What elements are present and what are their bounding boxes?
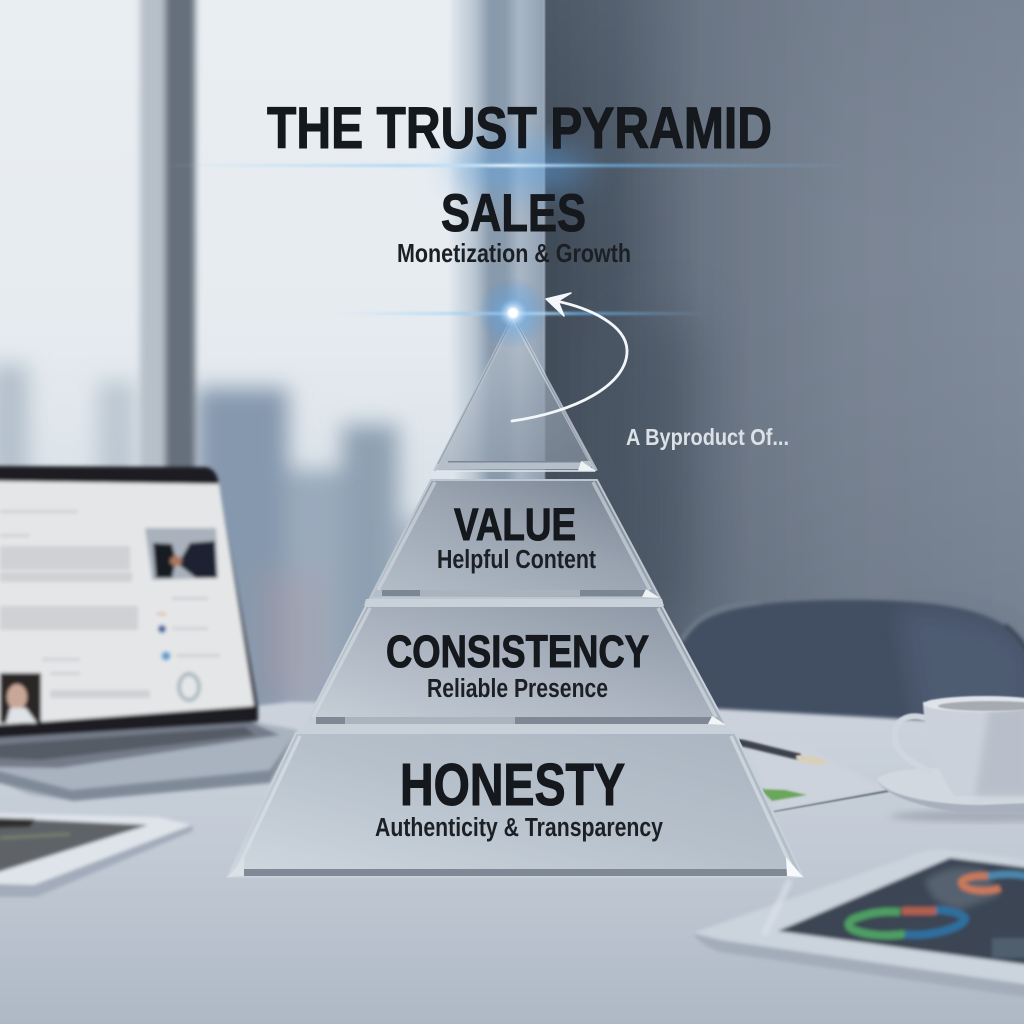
value label [437, 499, 596, 574]
donut chart green [849, 910, 965, 935]
sales label [397, 184, 631, 268]
laptop [0, 466, 298, 801]
arrow: byproduct curve [512, 293, 627, 421]
screen content [0, 510, 220, 723]
heading: value: VALUE [454, 499, 576, 550]
tier gaps [296, 599, 735, 733]
tier: value [370, 480, 660, 598]
laptop bezel [0, 466, 258, 738]
tablet left [0, 813, 193, 897]
pen and papers [738, 742, 889, 812]
pyramid [227, 318, 803, 877]
window skyline [0, 365, 455, 722]
subheading: reliable presence: Reliable Presence [427, 675, 608, 703]
tier: apex sales glass [435, 318, 596, 471]
subheading: monetization: Monetization & Growth [397, 238, 631, 268]
laptop base [0, 722, 298, 801]
subheading: authenticity: Authenticity & Transparency [375, 814, 664, 842]
chair [682, 600, 1024, 725]
donut chart orange [961, 874, 1024, 891]
window mullion [140, 0, 195, 480]
subheading: helpful content: Helpful Content [437, 546, 596, 574]
heading: honesty: HONESTY [400, 752, 625, 818]
title flare [160, 144, 850, 192]
table [0, 702, 1024, 1024]
tablet right [693, 849, 1024, 998]
title: THE TRUST PYRAMID [267, 96, 772, 161]
heading: sales: SALES [441, 184, 586, 243]
honesty label [375, 752, 664, 842]
coffee cup and saucer [877, 696, 1024, 822]
pillar [450, 0, 546, 620]
byproduct label: A Byproduct Of... [626, 424, 789, 450]
tablet reflection [764, 880, 790, 935]
wall [545, 0, 1024, 720]
tier: consistency [305, 606, 726, 725]
tier: honesty [227, 733, 803, 877]
heading: consistency: CONSISTENCY [386, 626, 649, 677]
consistency label [386, 626, 649, 703]
apex glow [330, 277, 710, 349]
laptop screen [0, 481, 254, 725]
